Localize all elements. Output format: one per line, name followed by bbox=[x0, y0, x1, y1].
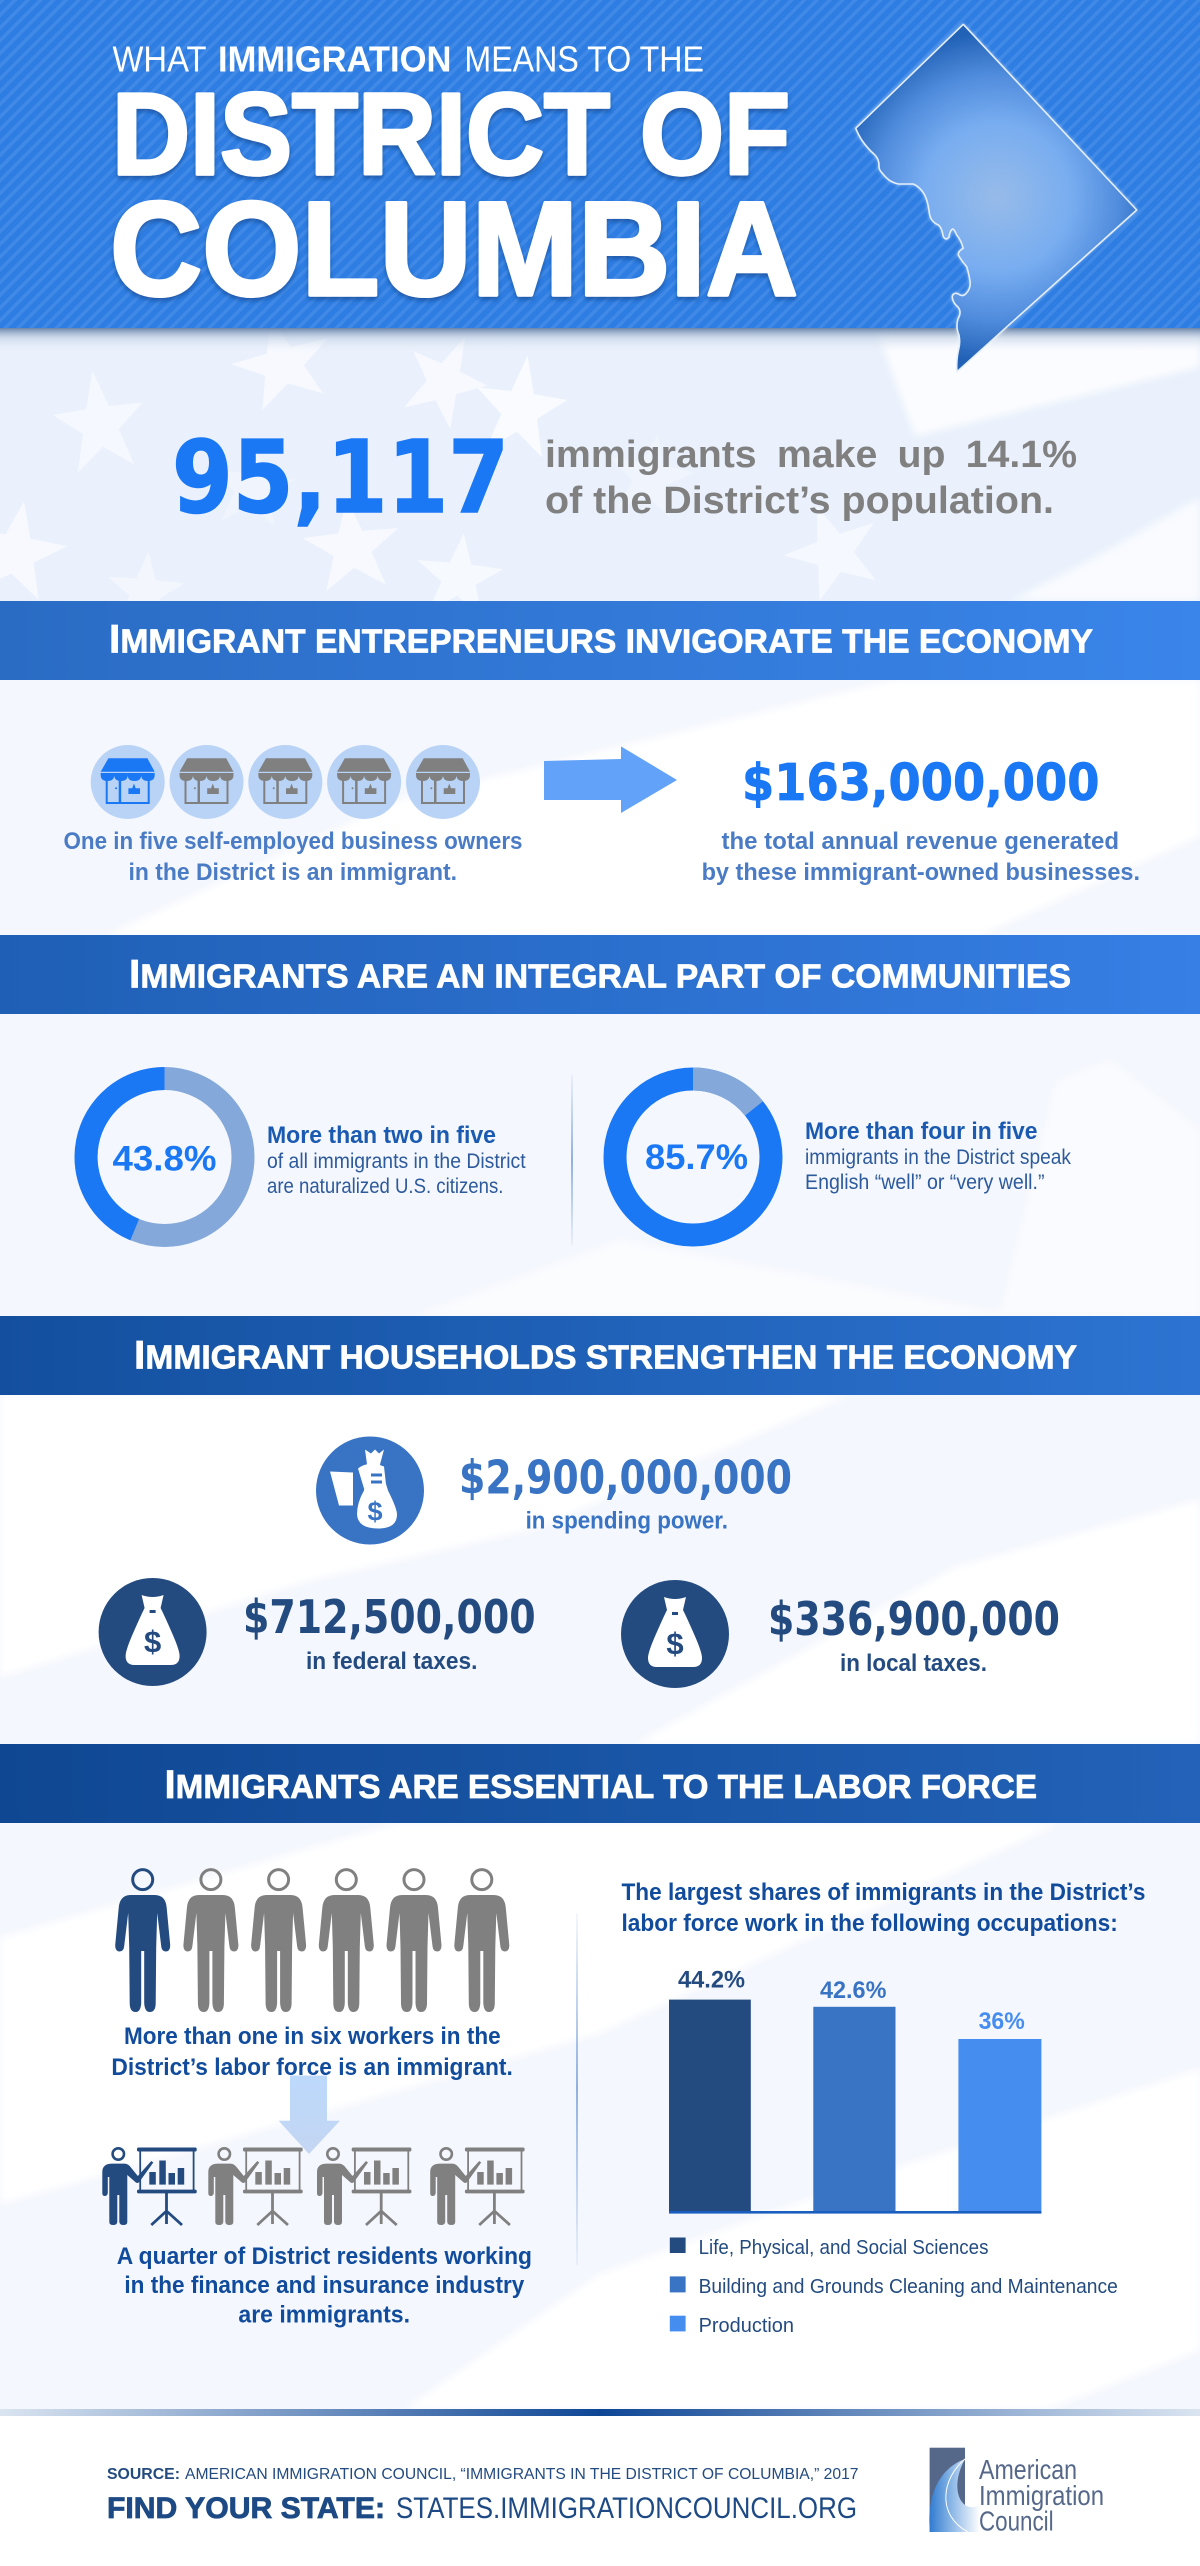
logo: American Immigration Council: Immigration bbox=[979, 2480, 1104, 2511]
text: revenue description: the total annual revenue generated bbox=[722, 828, 1119, 855]
text: one in six workers: District’s labor force is an immigrant. bbox=[111, 2054, 513, 2081]
headline stat: 95,117 immigrants bbox=[172, 419, 1077, 536]
icon: District of Columbia map bbox=[856, 24, 1137, 372]
logo: American Immigration Council: American bbox=[979, 2454, 1077, 2485]
stat: federal taxes bbox=[243, 1590, 536, 1675]
text: one in five business owners: in the District is an immigrant. bbox=[128, 859, 457, 886]
text: English proficiency: immigrants in the District speak bbox=[805, 1146, 1071, 1169]
text: quarter of finance residents bbox=[117, 2243, 532, 2328]
stat: local taxes: in local taxes. bbox=[840, 1650, 987, 1677]
legend: Production bbox=[699, 2315, 794, 2337]
text: one in five business owners: One in five self-employed business owners bbox=[64, 828, 522, 855]
find your state: STATES.IMMIGRATIONCOUNCIL.ORG bbox=[396, 2492, 857, 2525]
arrow: down bbox=[279, 2076, 340, 2154]
source line: SOURCE: bbox=[107, 2466, 180, 2483]
title: COLUMBIA bbox=[110, 175, 798, 324]
donut chart: 85.7% speak English: 85.7% bbox=[645, 1138, 748, 1177]
text: English proficiency bbox=[805, 1118, 1071, 1194]
title: DISTRICT OF bbox=[112, 69, 790, 199]
headline stat: 95,117 immigrants: of the District’s population. bbox=[545, 480, 1054, 522]
section heading: labor force bbox=[0, 1744, 1200, 1823]
panel: households bbox=[99, 1436, 1060, 1688]
pictogram: one in six workers bbox=[115, 1870, 509, 2012]
find your state: FIND YOUR STATE: bbox=[107, 2492, 385, 2525]
text: one in five business owners bbox=[64, 828, 522, 886]
source line: AMERICAN IMMIGRATION COUNCIL, “IMMIGRANTS IN THE DISTRICT OF COLUMBIA,” 2017 bbox=[185, 2466, 859, 2483]
stat: local taxes bbox=[768, 1592, 1060, 1677]
stat: federal taxes: $712,500,000 bbox=[243, 1590, 536, 1644]
donut chart: 43.8% naturalized: 43.8% bbox=[112, 1140, 216, 1178]
pictogram: presenters in finance bbox=[102, 2148, 525, 2225]
arrow: right bbox=[544, 746, 677, 813]
text: one in six workers: More than one in six workers in the bbox=[124, 2023, 501, 2050]
text: naturalized citizens: of all immigrants in the District bbox=[267, 1150, 526, 1173]
panel: labor force bbox=[102, 1870, 1145, 2337]
text: English proficiency: English “well” or “very well.” bbox=[805, 1171, 1045, 1194]
logo: American Immigration Council: Council bbox=[979, 2506, 1054, 2537]
stat: revenue: $163,000,000 bbox=[742, 754, 1100, 813]
text: naturalized citizens: are naturalized U.S. citizens. bbox=[267, 1175, 503, 1198]
header panel bbox=[0, 0, 1200, 352]
text: occupations heading bbox=[622, 1879, 1145, 1937]
headline stat: 95,117 immigrants: immigrants make up 14.1% bbox=[545, 434, 1077, 476]
text: revenue description bbox=[702, 828, 1140, 886]
stat: spending power: in spending power. bbox=[526, 1508, 728, 1535]
title: WHAT bbox=[112, 39, 207, 80]
title bbox=[110, 39, 798, 324]
legend: Building and Grounds Cleaning and Maintenance bbox=[699, 2276, 1118, 2298]
section heading: communities: IMMIGRANTS ARE AN INTEGRAL PART OF COMMUNITIES bbox=[129, 952, 1071, 996]
text: occupations heading: The largest shares of immigrants in the District’s bbox=[622, 1879, 1145, 1906]
section heading: entrepreneurs bbox=[0, 601, 1200, 680]
legend bbox=[670, 2237, 1118, 2337]
text: occupations heading: labor force work in the following occupations: bbox=[622, 1910, 1118, 1937]
icon: money bag federal: $ bbox=[144, 1624, 161, 1659]
text: one in six workers bbox=[111, 2023, 513, 2081]
stat: federal taxes: in federal taxes. bbox=[306, 1648, 477, 1675]
bar chart: occupations: 36% bbox=[979, 2008, 1025, 2035]
bar chart: occupations: 42.6% bbox=[820, 1977, 886, 2004]
section heading: households: IMMIGRANT HOUSEHOLDS STRENGTHEN THE ECONOMY bbox=[134, 1333, 1077, 1377]
icon: money bag local: $ bbox=[666, 1626, 684, 1661]
logo: American Immigration Council bbox=[929, 2448, 1104, 2537]
icon: hand holding money bag: $ bbox=[367, 1496, 383, 1526]
stat: spending power: $2,900,000,000 bbox=[459, 1451, 792, 1505]
footer bbox=[0, 2409, 1200, 2537]
section heading: labor force: IMMIGRANTS ARE ESSENTIAL TO THE LABOR FORCE bbox=[164, 1763, 1037, 1807]
section heading: communities bbox=[0, 935, 1200, 1014]
legend: Life, Physical, and Social Sciences bbox=[699, 2237, 988, 2259]
text: naturalized citizens: More than two in five bbox=[267, 1122, 496, 1149]
text: revenue description: by these immigrant-owned businesses. bbox=[702, 859, 1140, 886]
donut chart: 85.7% speak English bbox=[615, 1079, 771, 1235]
text: naturalized citizens bbox=[267, 1122, 526, 1198]
title: IMMIGRATION bbox=[218, 39, 451, 80]
text: English proficiency: More than four in five bbox=[805, 1118, 1038, 1145]
section heading: households bbox=[0, 1316, 1200, 1395]
icon: money bag local bbox=[621, 1580, 729, 1688]
text: quarter of finance residents: are immigrants. bbox=[238, 2301, 410, 2328]
text: quarter of finance residents: in the finance and insurance industry bbox=[124, 2272, 525, 2299]
title: MEANS TO THE bbox=[464, 39, 704, 80]
stat: spending power bbox=[459, 1451, 792, 1535]
headline stat: 95,117 immigrants: 95,117 bbox=[172, 419, 509, 536]
icon: hand holding money bag bbox=[316, 1436, 424, 1544]
text: quarter of finance residents: A quarter of District residents working bbox=[117, 2243, 532, 2270]
panel: communities bbox=[86, 1075, 1071, 1245]
bar chart: occupations: 44.2% bbox=[678, 1966, 745, 1994]
background stars bbox=[0, 306, 893, 627]
donut chart: 43.8% naturalized bbox=[86, 1078, 243, 1236]
stat: local taxes: $336,900,000 bbox=[768, 1592, 1060, 1646]
find your state bbox=[107, 2492, 857, 2525]
icon: money bag federal bbox=[99, 1578, 207, 1686]
bar chart: occupations bbox=[669, 1966, 1041, 2214]
icon: five storefronts, one highlighted bbox=[91, 745, 480, 819]
section heading: entrepreneurs: IMMIGRANT ENTREPRENEURS INVIGORATE THE ECONOMY bbox=[109, 618, 1093, 662]
panel: entrepreneurs bbox=[64, 745, 1140, 886]
